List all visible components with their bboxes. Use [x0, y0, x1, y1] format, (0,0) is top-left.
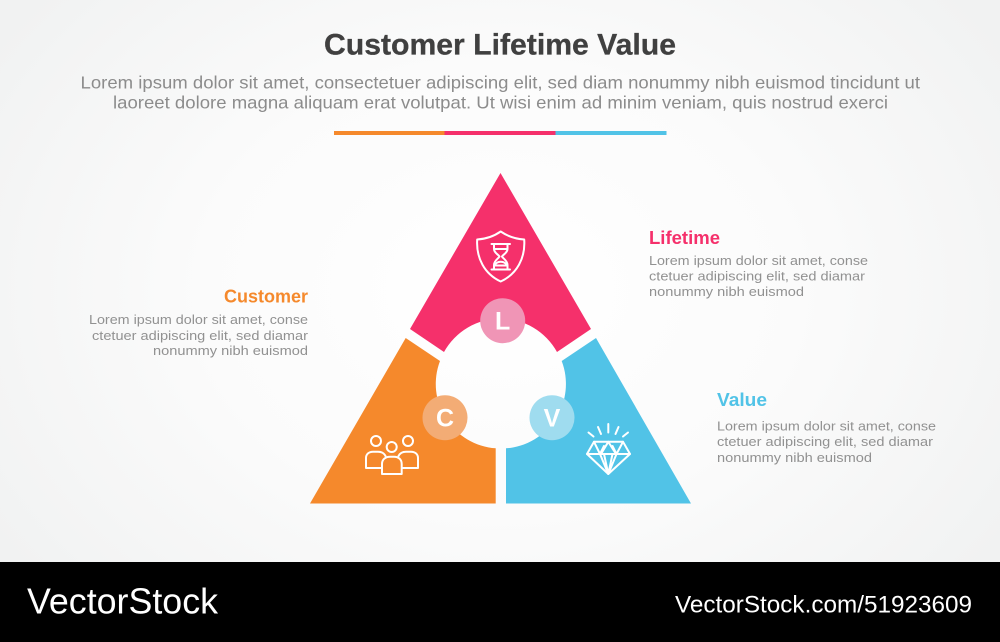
badge: V: V — [544, 404, 561, 432]
badge: C: C — [436, 404, 454, 432]
text block: customer: nonummy nibh euismod — [153, 343, 308, 358]
tricolor divider — [334, 131, 666, 135]
badge: C — [422, 395, 468, 440]
segment: value — [506, 338, 691, 504]
text block: lifetime: nonummy nibh euismod — [649, 284, 804, 299]
icon: diamond — [587, 424, 630, 474]
intro text — [80, 72, 920, 112]
badge: L: L — [495, 308, 510, 336]
title: Customer Lifetime Value — [324, 28, 676, 62]
footer logo text: VectorStock — [27, 580, 219, 622]
badge: L — [480, 298, 525, 343]
text block: lifetime: Lifetime — [649, 228, 720, 248]
intro text: laoreet dolore magna aliquam erat volutpat. Ut wisi enim ad minim veniam, quis nostrud exerci — [113, 92, 888, 112]
triangle diagram — [310, 173, 691, 504]
footer band — [0, 562, 1000, 642]
icon: people group — [366, 436, 418, 474]
text block: value: ctetuer adipiscing elit, sed diamar — [717, 434, 934, 449]
intro text: Lorem ipsum dolor sit amet, consectetuer adipiscing elit, sed diam nonummy nibh euismod tincidunt ut — [80, 72, 920, 92]
segment: lifetime — [410, 173, 591, 352]
text block: value: Lorem ipsum dolor sit amet, conse — [717, 418, 936, 434]
text block: value — [717, 390, 936, 465]
text block: value: Value — [717, 390, 767, 410]
text block: lifetime: Lorem ipsum dolor sit amet, conse — [649, 253, 868, 268]
footer image id: VectorStock.com/51923609 — [675, 592, 972, 618]
text block: lifetime — [649, 228, 868, 299]
badge: V — [530, 395, 574, 440]
text block: lifetime: ctetuer adipiscing elit, sed diamar — [649, 268, 866, 284]
text block: value: nonummy nibh euismod — [717, 450, 872, 465]
text block: customer: Customer — [224, 286, 308, 306]
text block: customer — [89, 286, 309, 358]
text block: customer: Lorem ipsum dolor sit amet, conse — [89, 312, 308, 327]
icon: shield with hourglass — [477, 232, 524, 282]
segment: customer — [310, 338, 496, 504]
text block: customer: ctetuer adipiscing elit, sed diamar — [92, 328, 309, 343]
